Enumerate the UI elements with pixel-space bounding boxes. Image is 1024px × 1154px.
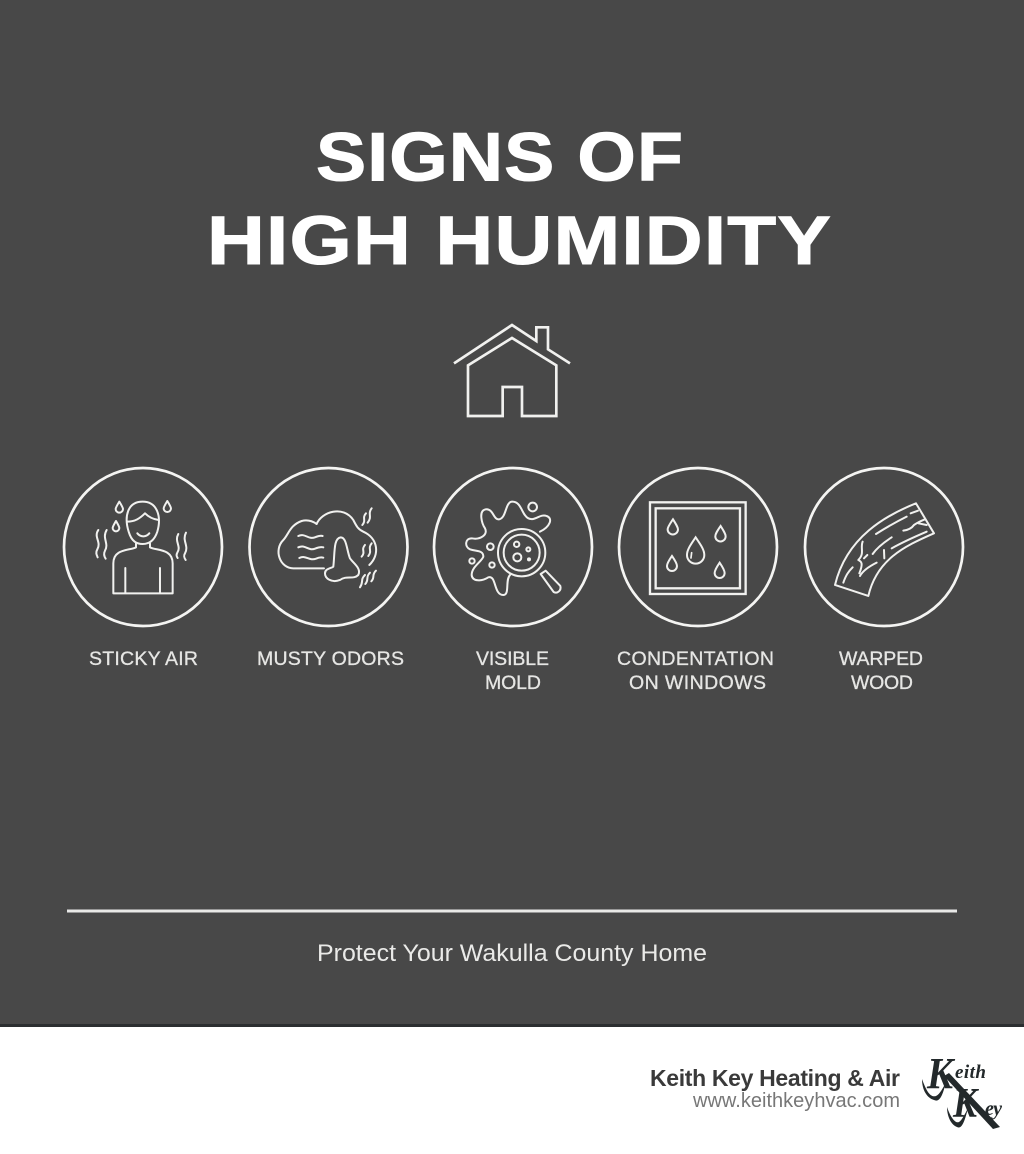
logo: Keith Key: ey [985,1098,1002,1120]
circle: condensation [619,468,777,626]
panel: condensation on windows [617,468,777,694]
panel: sticky air [64,468,222,670]
label: musty odors: MUSTY ODORS [257,648,404,670]
circle: visible mold [434,468,592,626]
company name: Keith Key Heating & Air [650,1065,900,1091]
footer separator [0,1024,1024,1027]
label: warped wood [839,648,923,694]
icon: cloud and nose [278,508,376,587]
label: visible mold: VISIBLE [476,648,549,670]
panel: visible mold [434,468,592,694]
title: HIGH HUMIDITY [207,202,832,279]
label: condensation on windows: CONDENTATION [617,648,774,670]
footer panel [0,1027,1024,1154]
label: warped wood: WOOD [851,672,913,694]
circle: warped wood [805,468,963,626]
icon: window with droplets [650,502,746,594]
logo: Keith Key: K [952,1081,980,1127]
icon: mold with magnifier [466,502,561,595]
website url: www.keithkeyhvac.com [692,1090,900,1112]
icon: warped wood plank [835,503,934,596]
label: warped wood: WARPED [839,648,923,670]
icon: sweating person [96,501,186,593]
icon: house [454,325,570,416]
divider line [67,910,957,912]
circle: musty odors [250,468,408,626]
label: visible mold [476,648,549,694]
label: condensation on windows: ON WINDOWS [629,672,766,694]
logo: Keith Key: eith [955,1062,986,1083]
panel: musty odors [250,468,408,670]
tagline: Protect Your Wakulla County Home [317,940,707,967]
logo: Keith Key [922,1049,1002,1129]
panel: warped wood [805,468,963,694]
circle: sticky air [64,468,222,626]
title: SIGNS OF [316,118,684,196]
logo: Keith Key: K [926,1049,955,1098]
label: condensation on windows [617,648,774,694]
label: visible mold: MOLD [485,672,541,694]
label: sticky air: STICKY AIR [89,648,198,670]
title [207,118,832,279]
